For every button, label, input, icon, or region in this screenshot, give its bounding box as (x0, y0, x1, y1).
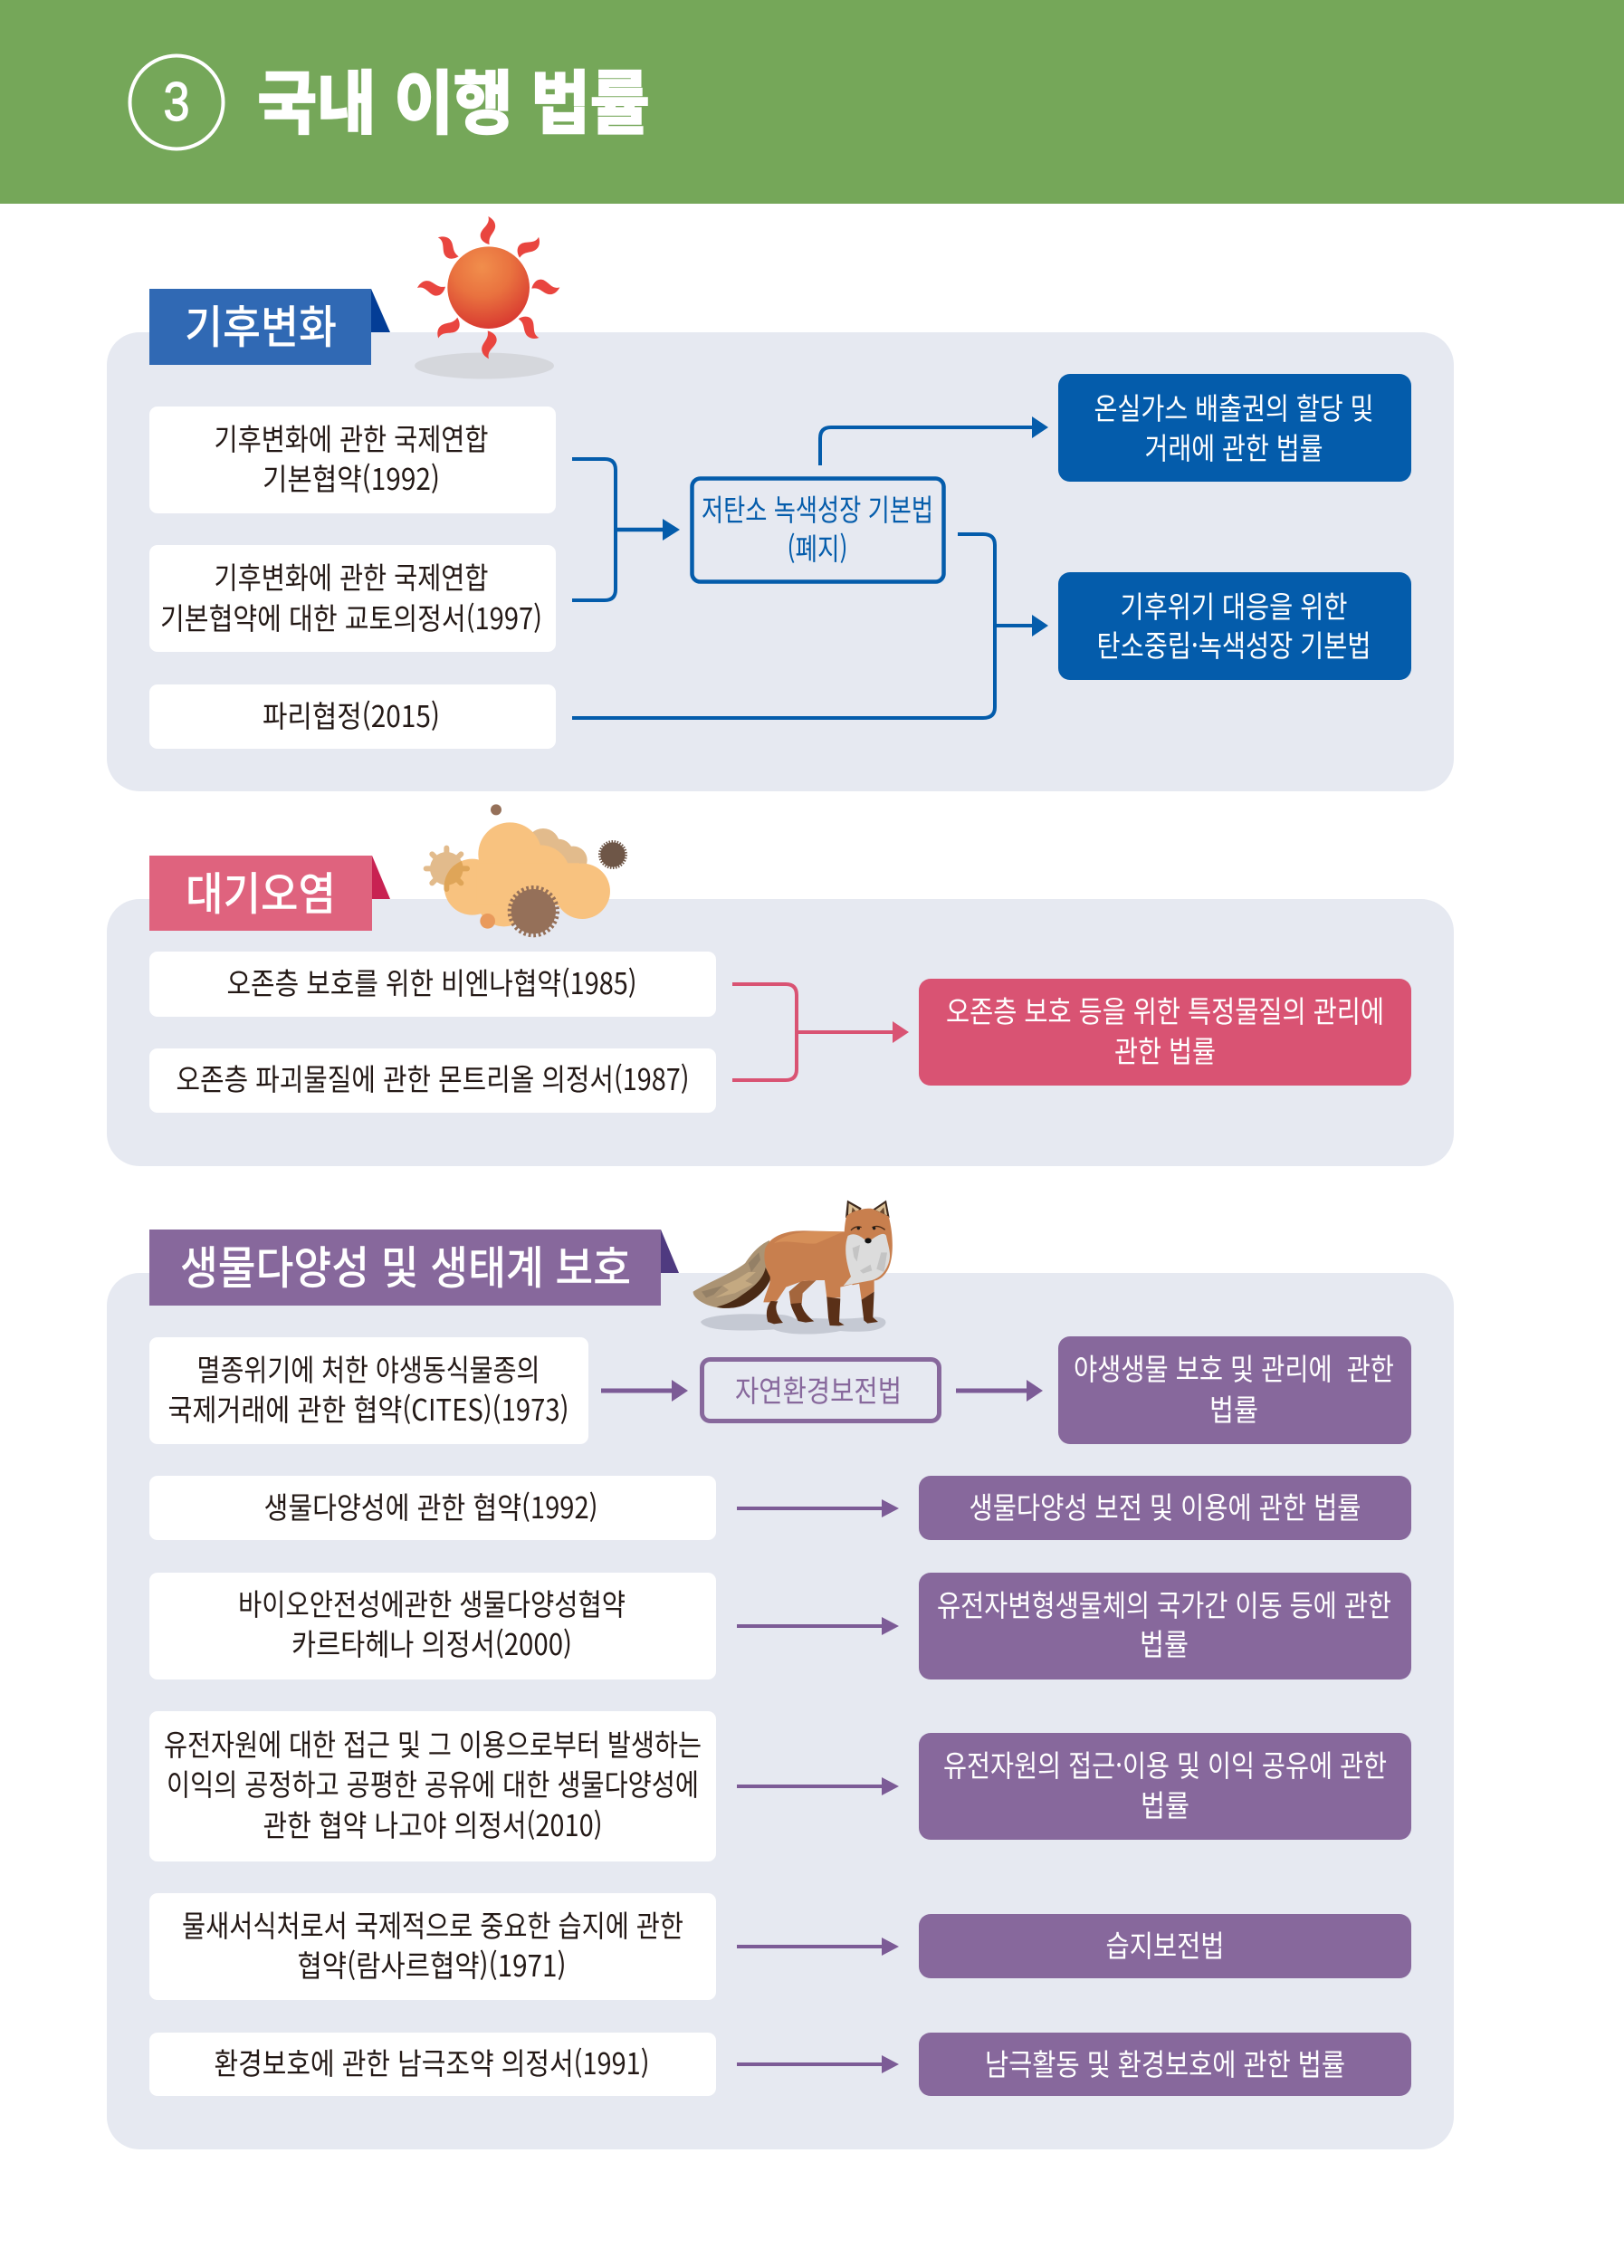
box: LMO act (919, 1573, 1411, 1679)
treaty: Vienna convention (149, 952, 716, 1017)
box: genetic resources act (919, 1733, 1411, 1840)
section number circle: 3 (163, 72, 190, 132)
box: low carbon green growth act: 저탄소 녹색성장 기본법 (702, 486, 933, 530)
treaty: Cartagena protocol: 카르타헤나 의정서(2000) (291, 1621, 572, 1664)
tan gear particle (426, 848, 467, 889)
box: wetland act (919, 1914, 1411, 1978)
box: wildlife act: 야생생물 보호 및 관리에 관한 (1074, 1345, 1394, 1389)
treaty: UNFCCC 1992: 기후변화에 관한 국제연합 (214, 416, 489, 459)
arrow: row 6 (737, 2055, 899, 2073)
box: ozone layer act: 오존층 보호 등을 위한 특정물질의 관리에 (946, 988, 1384, 1031)
section number circle (130, 56, 223, 148)
treaty: Paris agreement 2015: 파리협정(2015) (263, 693, 440, 736)
box: genetic resources act: 법률 (1141, 1782, 1189, 1825)
treaty: Ramsar convention (149, 1893, 716, 2000)
treaty: Ramsar convention: 협약(람사르협약)(1971) (297, 1942, 567, 1986)
treaty: Kyoto protocol 1997 (149, 545, 556, 652)
box: ozone layer act (919, 979, 1411, 1086)
heading: air pollution (149, 856, 390, 931)
treaty: Nagoya protocol (149, 1711, 716, 1861)
treaty: CITES: 멸종위기에 처한 야생동식물종의 (197, 1346, 540, 1390)
box: carbon neutrality act (1058, 572, 1411, 680)
box: LMO act: 법률 (1140, 1621, 1189, 1664)
treaty: Nagoya protocol: 관한 협약 나고야 의정서(2010) (263, 1802, 603, 1845)
box: ozone layer act: 관한 법률 (1114, 1028, 1216, 1071)
box: LMO act: 유전자변형생물체의 국가간 이동 등에 관한 (937, 1582, 1391, 1625)
arrow: nature act to wildlife act (956, 1380, 1043, 1402)
heading: air pollution: 대기오염 (186, 858, 336, 923)
panel: climate change (107, 216, 1454, 791)
box: Antarctic act: 남극활동 및 환경보호에 관한 법률 (985, 2041, 1345, 2084)
box: natural environment conservation act: 자연환경보전법 (735, 1367, 902, 1411)
legs (767, 1292, 878, 1325)
large brown particle (510, 888, 557, 935)
box: low carbon green growth act (692, 478, 943, 581)
icon: sun (415, 216, 559, 378)
treaty: Cartagena protocol (149, 1573, 716, 1679)
treaty: Antarctic protocol: 환경보호에 관한 남극조약 의정서(1991) (214, 2040, 650, 2083)
treaty: UNFCCC 1992 (149, 407, 556, 513)
icon: fox (693, 1201, 893, 1335)
arrow: row 4 (737, 1777, 899, 1795)
head and ruff (844, 1201, 893, 1286)
treaty: Paris agreement 2015 (149, 684, 556, 749)
heading: climate change (149, 289, 390, 365)
header banner (0, 0, 1624, 204)
arrow: treaties to low carbon act (572, 459, 680, 600)
box: genetic resources act: 유전자원의 접근·이용 및 이익 공유에 관한 (943, 1742, 1387, 1785)
treaty: Cartagena protocol: 바이오안전성에관한 생물다양성협약 (238, 1581, 626, 1624)
treaty: biodiversity convention (149, 1476, 716, 1540)
treaty: Montreal protocol: 오존층 파괴물질에 관한 몬트리올 의정서(1987) (176, 1056, 690, 1099)
icon: dust cloud (426, 804, 626, 935)
treaty: Ramsar convention: 물새서식처로서 국제적으로 중요한 습지에 관한 (182, 1902, 683, 1946)
treaty: CITES (149, 1337, 588, 1444)
heading: biodiversity and ecosystem: 생물다양성 및 생태계 보호 (180, 1232, 631, 1297)
treaty: Kyoto protocol 1997: 기후변화에 관한 국제연합 (214, 554, 489, 598)
arrow: to emission trading act (820, 416, 1048, 465)
box: wildlife act (1058, 1336, 1411, 1444)
treaty: Montreal protocol (149, 1048, 716, 1113)
body (763, 1230, 853, 1302)
box: biodiversity act: 생물다양성 보전 및 이용에 관한 법률 (969, 1484, 1361, 1527)
treaty: biodiversity convention: 생물다양성에 관한 협약(1992) (264, 1484, 597, 1527)
dark brown particle (600, 842, 626, 867)
arrow: CITES to nature act (601, 1380, 688, 1402)
box: emission trading act: 거래에 관한 법률 (1144, 425, 1323, 468)
box: emission trading act (1058, 374, 1411, 482)
treaty: CITES: 국제거래에 관한 협약(CITES)(1973) (168, 1386, 568, 1430)
arrow: row 2 (737, 1499, 899, 1517)
arrow: row 5 (737, 1938, 899, 1956)
arrow: treaties to ozone act (732, 984, 909, 1080)
heading: climate change: 기후변화 (185, 292, 337, 357)
box: Antarctic act (919, 2033, 1411, 2096)
box: carbon neutrality act: 탄소중립·녹색성장 기본법 (1097, 622, 1371, 665)
box: low carbon green growth act: (폐지) (788, 525, 847, 569)
treaty: Nagoya protocol: 이익의 공정하고 공평한 공유에 대한 생물다양성에 (167, 1761, 699, 1804)
treaty: Vienna convention: 오존층 보호를 위한 비엔나협약(1985) (226, 960, 637, 1003)
box: wildlife act: 법률 (1209, 1386, 1258, 1430)
tail (693, 1240, 771, 1308)
box: carbon neutrality act: 기후위기 대응을 위한 (1121, 583, 1347, 627)
box: wetland act: 습지보전법 (1106, 1922, 1224, 1966)
treaty: Antarctic protocol (149, 2033, 716, 2096)
box: emission trading act: 온실가스 배출권의 할당 및 (1094, 385, 1374, 428)
box: natural environment conservation act (702, 1360, 940, 1421)
panel: biodiversity and ecosystem (107, 1201, 1454, 2149)
panel: air pollution (107, 804, 1454, 1166)
title: 국내 이행 법률 (257, 48, 650, 148)
treaty: Kyoto protocol 1997: 기본협약에 대한 교토의정서(1997) (160, 595, 542, 638)
treaty: Nagoya protocol: 유전자원에 대한 접근 및 그 이용으로부터 발생하는 (164, 1721, 702, 1765)
arrow: to carbon neutrality act (572, 534, 1048, 718)
arrow: row 3 (737, 1617, 899, 1635)
treaty: UNFCCC 1992: 기본협약(1992) (263, 455, 440, 499)
box: biodiversity act (919, 1476, 1411, 1540)
